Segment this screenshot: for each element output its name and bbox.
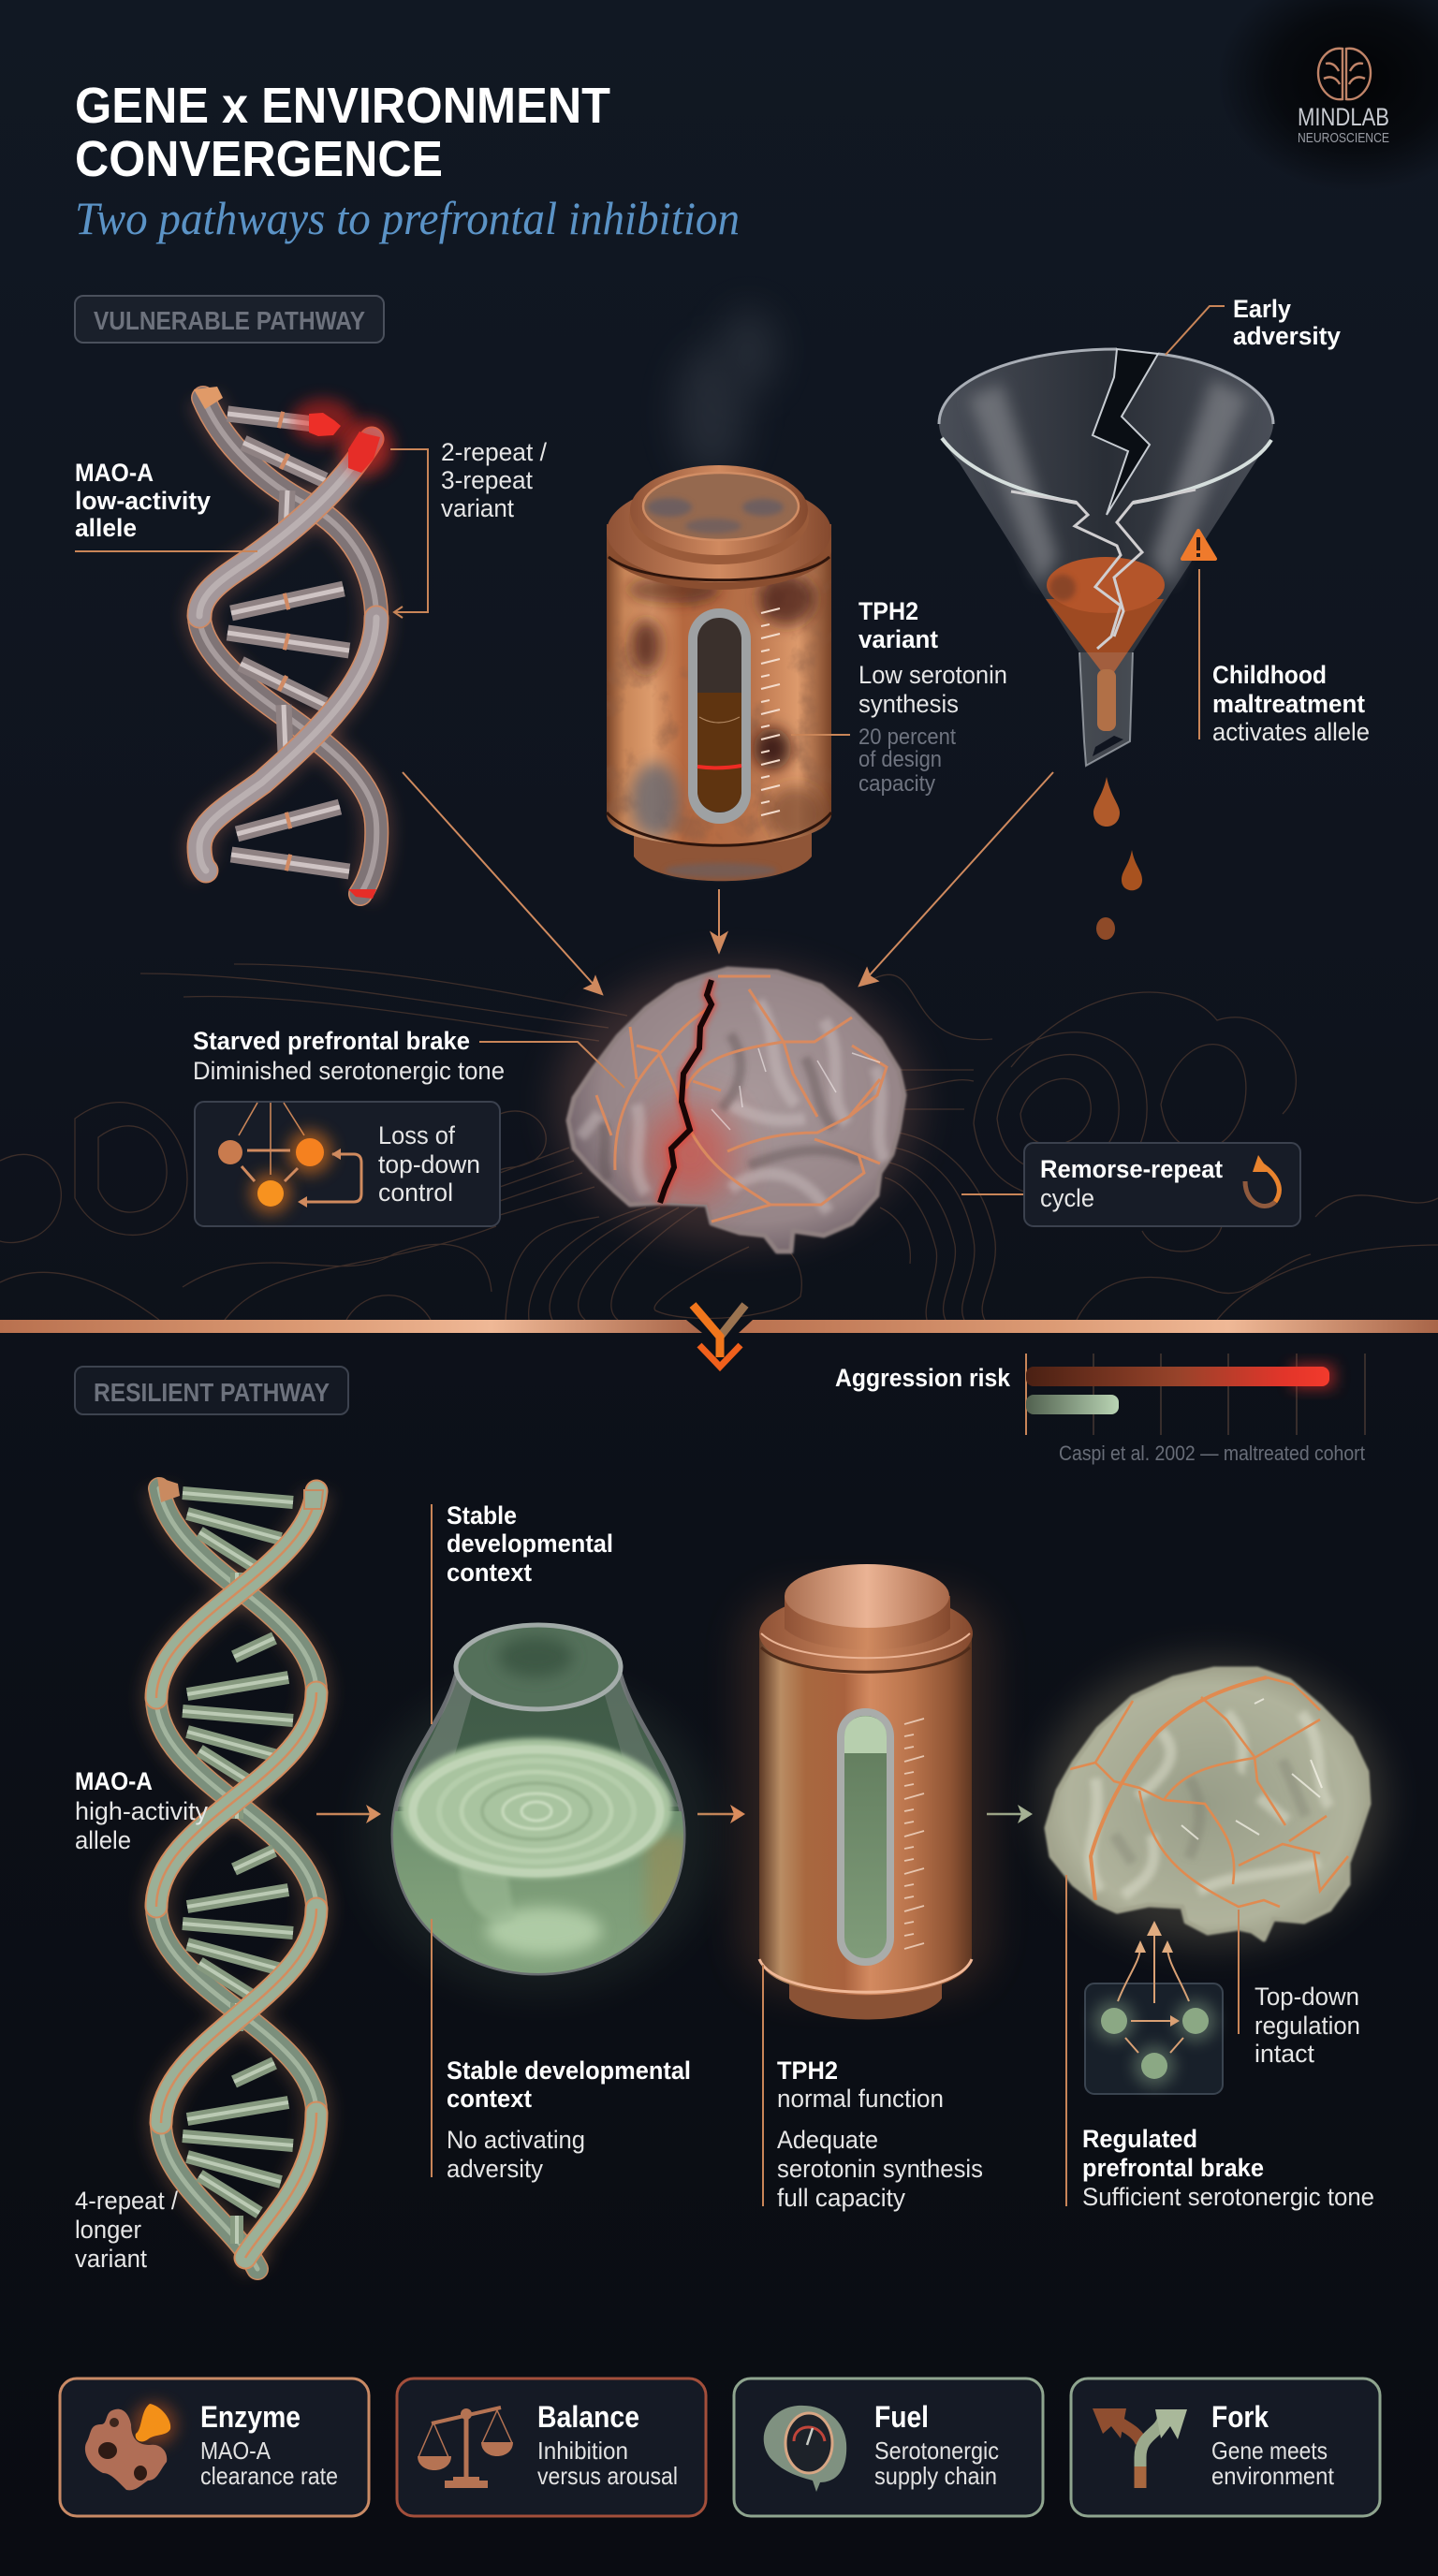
card: balance: versus arousal: [537, 2462, 678, 2490]
panel: loss of top-down control: Loss of: [378, 1121, 455, 1149]
label: MAO-A low-activity allele: MAO-A: [75, 459, 154, 487]
icon: starved brain with crack: [554, 964, 919, 1251]
label: top-down regulation intact: [1239, 1910, 1360, 2068]
icon: enzyme puzzle blob: [85, 2402, 177, 2490]
label: MAO-A low-activity allele: low-activity: [75, 487, 211, 515]
label: childhood maltreatment: Childhood: [1212, 661, 1327, 689]
logo: MindLab Neuroscience: NEUROSCIENCE: [1298, 130, 1389, 146]
label: regulated prefrontal brake: [1066, 1875, 1374, 2211]
label: childhood maltreatment: maltreatment: [1212, 690, 1365, 718]
label: top-down regulation intact: Top-down: [1255, 1983, 1359, 2011]
arrows converging on brain: [403, 772, 1053, 994]
card: balance: Inhibition: [537, 2437, 628, 2465]
label: starved prefrontal brake: Starved prefrontal brake: [193, 1027, 470, 1055]
label: regulated prefrontal brake: prefrontal brake: [1082, 2154, 1264, 2182]
label: stable developmental context (top): developmental: [447, 1530, 613, 1558]
label: early adversity: adversity: [1233, 322, 1341, 350]
label: stable developmental context (top): [432, 1501, 613, 1724]
label: stable developmental context (top): context: [447, 1559, 532, 1587]
pill: vulnerable pathway: [75, 296, 384, 343]
panel: loss of top-down control: top-down: [378, 1150, 480, 1178]
icon: fork chevron arrow: [693, 1305, 745, 1367]
card: balance: [397, 2378, 706, 2516]
label: stable developmental context (bottom): [432, 1919, 691, 2183]
logo: MindLab Neuroscience: [1298, 49, 1389, 146]
card: fork: Fork: [1211, 2400, 1269, 2434]
title: CONVERGENCE: [75, 131, 443, 187]
label: stable developmental context (top): Stable: [447, 1501, 517, 1530]
panel: loss of top-down control: [195, 1102, 500, 1226]
card: enzyme: [60, 2378, 369, 2516]
divider bar: [0, 1320, 1438, 1333]
label: TPH2 variant: Low serotonin: [858, 661, 1007, 689]
card: fork: [1071, 2378, 1380, 2516]
label: childhood maltreatment: [1199, 569, 1370, 746]
label: MAO-A high-activity allele: [75, 1767, 208, 1854]
label: TPH2 variant: synthesis: [858, 690, 959, 718]
label: TPH2 normal function: TPH2: [777, 2056, 838, 2085]
panel: regulated circuit diagram: [1085, 1921, 1223, 2094]
label: 4-repeat longer variant: longer: [75, 2216, 141, 2244]
icon: polished copper canister: [740, 1564, 992, 2020]
label: top-down regulation intact: intact: [1255, 2040, 1314, 2068]
label: MAO-A high-activity allele: high-activity: [75, 1797, 208, 1825]
icon: regulated healthy brain: [1039, 1657, 1386, 1947]
panel: remorse-repeat cycle: Remorse-repeat: [1040, 1155, 1223, 1183]
label: stable developmental context (bottom): Stable developmental: [447, 2056, 691, 2085]
label: early adversity: [1166, 295, 1341, 355]
label: TPH2 variant: 20 percent: [858, 724, 956, 750]
label: stable developmental context (bottom): No activating: [447, 2126, 585, 2154]
label: MAO-A high-activity allele: allele: [75, 1826, 131, 1854]
label: TPH2 variant: variant: [858, 625, 938, 653]
icon: damaged DNA helix: [194, 387, 393, 899]
card: fuel: [734, 2378, 1043, 2516]
card: fork: Gene meets: [1211, 2437, 1328, 2465]
panel: remorse-repeat cycle: cycle: [1040, 1184, 1094, 1212]
label: 4-repeat longer variant: variant: [75, 2245, 147, 2273]
panel: remorse-repeat cycle: [961, 1143, 1300, 1226]
label: starved prefrontal brake: [193, 1027, 624, 1088]
smoke: [676, 309, 777, 477]
label: TPH2 variant: TPH2: [858, 597, 918, 625]
logo: MindLab Neuroscience: MINDLAB: [1298, 103, 1389, 131]
card: enzyme: clearance rate: [200, 2462, 338, 2490]
icon: forked arrows: [1093, 2408, 1187, 2488]
label: TPH2 normal function: Adequate: [777, 2126, 878, 2154]
label: MAO-A low-activity allele: allele: [75, 514, 137, 542]
card: fuel: Fuel: [874, 2400, 929, 2434]
card: balance: Balance: [537, 2400, 639, 2434]
label: TPH2 variant: of design: [858, 747, 942, 772]
label: 2-repeat / 3-repeat variant: 2-repeat /: [441, 438, 547, 466]
icon: warning triangle: [1182, 531, 1215, 559]
droplets: [1093, 777, 1142, 940]
card: fuel: supply chain: [874, 2462, 997, 2490]
label: TPH2 normal function: full capacity: [777, 2184, 905, 2212]
icon: brain gauge: [764, 2406, 846, 2492]
label: regulated prefrontal brake: Sufficient serotonergic tone: [1082, 2183, 1374, 2211]
icon: corroded copper canister: [607, 465, 831, 881]
card: enzyme: MAO-A: [200, 2437, 271, 2465]
label: 2-repeat / 3-repeat variant: [390, 438, 547, 618]
icon: healthy DNA helix: [156, 1477, 323, 2269]
label: MAO-A low-activity allele: [75, 459, 257, 551]
title: GENE x ENVIRONMENT: [75, 78, 610, 134]
label: 4-repeat longer variant: 4-repeat /: [75, 2187, 178, 2215]
icon: flask of green liquid: [360, 1625, 716, 1994]
chart: aggression risk bars: Caspi et al. 2002 — maltreated cohort: [1059, 1442, 1365, 1465]
subtitle: Two pathways to prefrontal inhibition: [75, 192, 740, 244]
label: regulated prefrontal brake: Regulated: [1082, 2125, 1197, 2153]
icon: cracked glass funnel: [939, 349, 1273, 766]
label: early adversity: Early: [1233, 295, 1291, 323]
card: fork: environment: [1211, 2462, 1335, 2490]
label: stable developmental context (bottom): context: [447, 2085, 532, 2113]
label: TPH2 normal function: [763, 1965, 983, 2212]
pill: vulnerable pathway: VULNERABLE PATHWAY: [94, 306, 365, 335]
label: 2-repeat / 3-repeat variant: 3-repeat: [441, 466, 533, 494]
label: TPH2 normal function: normal function: [777, 2085, 944, 2113]
label: childhood maltreatment: activates allele: [1212, 718, 1370, 746]
pill: resilient pathway: RESILIENT PATHWAY: [94, 1378, 330, 1407]
label: TPH2 normal function: serotonin synthesis: [777, 2155, 983, 2183]
label: 4-repeat longer variant: [75, 2187, 178, 2273]
pill: resilient pathway: [75, 1367, 348, 1414]
chart: aggression risk bars: Aggression risk: [835, 1364, 1011, 1392]
flow arrows: [316, 1805, 1033, 1823]
panel: loss of top-down control: control: [378, 1178, 453, 1207]
label: stable developmental context (bottom): adversity: [447, 2155, 543, 2183]
label: top-down regulation intact: regulation: [1255, 2012, 1360, 2040]
label: TPH2 variant: capacity: [858, 771, 935, 797]
icon: scales: [418, 2408, 513, 2488]
label: 2-repeat / 3-repeat variant: variant: [441, 494, 514, 522]
card: fuel: Serotonergic: [874, 2437, 999, 2465]
title: [75, 78, 610, 187]
label: MAO-A high-activity allele: MAO-A: [75, 1767, 153, 1795]
card: enzyme: Enzyme: [200, 2400, 301, 2434]
label: starved prefrontal brake: Diminished serotonergic tone: [193, 1057, 505, 1085]
label: TPH2 variant: [791, 597, 1007, 797]
chart: aggression risk bars: [835, 1354, 1365, 1465]
